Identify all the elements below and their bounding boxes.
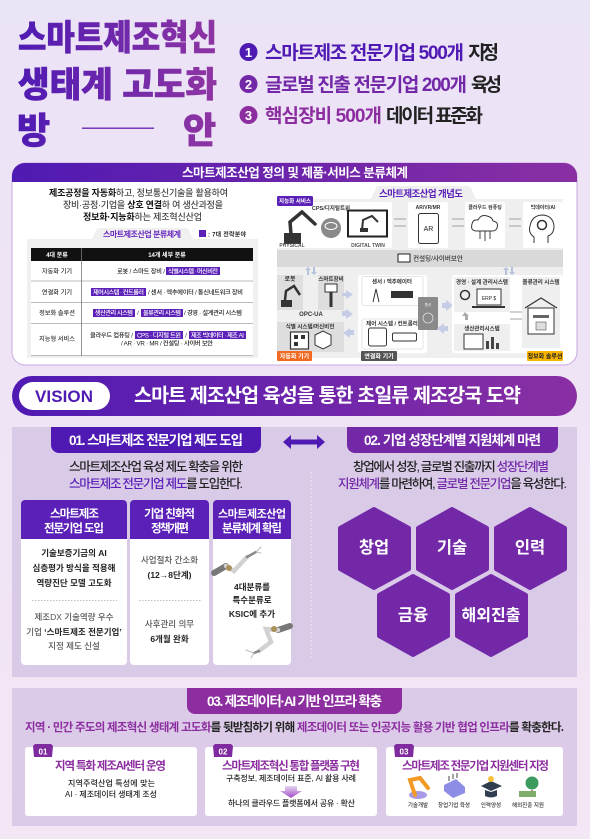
title: 방 <box>17 110 50 151</box>
card 02: integrated platform: 구축정보, 제조데이터 표준, AI 활용 사례 <box>226 773 356 783</box>
card: expert company: 기업 ‘스마트제조 전문기업’ <box>26 627 122 637</box>
card: policy reform: 6개월 완화 <box>150 634 189 644</box>
icon: technology development: 기술개발 <box>408 801 428 809</box>
box: cloud: 클라우드 컴퓨팅 <box>468 204 502 211</box>
hexagon: technology: 기술 <box>437 538 467 557</box>
goal 2: 2 <box>245 77 252 92</box>
box: digital twin: CPS/디지털트윈 <box>312 204 350 212</box>
title: 안 <box>183 110 216 151</box>
flow arrows <box>342 290 453 338</box>
badge 01: 01 <box>39 748 48 756</box>
hexagon: finance <box>379 576 448 655</box>
card 02: integrated platform: 하나의 클라우드 플랫폼에서 공유 · 확산 <box>228 798 356 808</box>
text: pillar 02 intro: 지원체계를 마련하여, 글로벌 전문기업을 육성한다. <box>338 477 567 491</box>
panel: definition and classification <box>12 163 577 365</box>
goal 3 <box>240 105 483 127</box>
badge 02: 02 <box>219 748 228 756</box>
header 01 <box>51 427 261 453</box>
card 03: support center <box>386 744 563 816</box>
key goals list <box>240 42 502 127</box>
concept tab: 스마트제조산업 개념도 <box>379 188 463 200</box>
row: information: 생산관리 시스템 <box>95 309 133 317</box>
goal 2: 육성 <box>471 74 502 96</box>
card 01: regional AI center: 지역 특화 제조AI센터 운영 <box>55 758 166 772</box>
card: expert company <box>21 500 127 665</box>
row: intelligence: 제조 빅데이터 · 제조 AI <box>191 332 244 340</box>
vision pill: VISION <box>35 387 93 406</box>
row: information: / 경영 · 설계관리 시스템 <box>184 309 242 317</box>
badge: connection devices: 연결화 기기 <box>364 352 394 360</box>
box: digital twin: DIGITAL TWIN <box>351 243 385 249</box>
card 02: integrated platform <box>205 744 377 816</box>
card 02: integrated platform: 스마트제조혁신 통합 플랫폼 구현 <box>222 758 360 772</box>
header 01: 01. 스마트제조 전문기업 제도 도입 <box>69 433 243 448</box>
group: connection devices <box>358 275 438 361</box>
icon: monitor <box>348 210 387 236</box>
header 02: 02. 기업 성장단계별 지원체계 마련 <box>364 433 541 448</box>
panel: pillars 01 and 02 <box>12 427 577 677</box>
classification table <box>27 239 258 358</box>
goal 3: 3 <box>245 108 252 123</box>
box: identification system: 식별 시스템/머신비전 <box>286 322 334 330</box>
definition text: 정보화·지능화하는 제조혁신산업 <box>83 211 202 222</box>
row: connection: / 센서 · 엑추에이터 / 통신네트워크 장비 <box>148 288 243 296</box>
text: pillar 01 intro <box>69 460 243 491</box>
arrows between boxes <box>394 219 521 226</box>
box: controller: 제어 시스템 / 컨트롤러 <box>366 320 418 328</box>
goal 1: 1 <box>245 45 252 60</box>
row: information: / <box>137 310 139 317</box>
badge: intelligent service: 지능화 서비스 <box>279 197 311 205</box>
box: AR: AR <box>424 226 433 233</box>
icon: overseas support <box>512 776 544 809</box>
badge: information solution: 정보화 솔루션 <box>528 352 562 360</box>
panel header <box>12 163 577 182</box>
hexagon: overseas: 해외진출 <box>462 606 521 624</box>
hexagon: finance: 금융 <box>398 606 428 624</box>
icon: technology development <box>408 778 428 809</box>
badge 03: 03 <box>400 748 409 756</box>
row: connection: 연결화 기기 <box>42 288 72 296</box>
card: expert company: 스마트제조 <box>50 506 99 520</box>
header 03 <box>187 688 402 714</box>
box: ERP: 경영 · 설계 관리시스템 <box>456 278 508 286</box>
icon: talent cultivation: 인력양성 <box>481 801 501 809</box>
classification tab <box>92 228 193 239</box>
badge: intelligent service <box>277 196 313 206</box>
text: pillar 02 intro: 창업에서 성장, 글로벌 진출까지 성장단계별 <box>353 460 549 474</box>
card: expert company: 제조DX 기술역량 우수 <box>34 612 114 622</box>
card: expert company: 지정 제도 신설 <box>48 641 100 651</box>
box: digital twin <box>277 202 392 249</box>
panel: data and AI infrastructure <box>12 688 577 826</box>
goal 2: 글로벌 진출 전문기업 200개 <box>265 74 467 96</box>
row: automation: 로봇 / 스마트 장비 / <box>117 268 165 276</box>
intro sentence: 지역 · 민간 주도의 제조혁신 생태계 고도화를 뒷받침하기 위해 제조데이터 또는 인공지능 활용 기반 협업 인프라를 확충한다. <box>25 720 564 734</box>
row: intelligence: / AR · VR · MR / 컨설팅 · 사이버 보안 <box>121 340 213 348</box>
row: intelligence: 클라우드 컴퓨팅 / <box>90 332 133 340</box>
card 01: regional AI center: AI · 제조데이터 생태계 조성 <box>65 789 157 799</box>
box: big data AI <box>523 202 563 248</box>
title: 스마트제조혁신 <box>18 19 217 58</box>
row: automation: 자동화 기기 <box>42 268 72 276</box>
vision statement: 스마트 제조산업 육성을 통한 초일류 제조강국 도약 <box>134 385 521 407</box>
icon: robot arm top <box>214 547 261 573</box>
row: intelligence: CPS · 디지털 트윈 <box>137 332 181 340</box>
card: policy reform: 정책개편 <box>151 522 189 535</box>
text: pillar 01 intro: 스마트제조산업 육성 제도 확충을 위한 <box>69 460 243 474</box>
box: sensor: 센서 / 엑추에이터 <box>372 278 412 286</box>
vision banner <box>12 376 577 416</box>
concept tab <box>371 186 476 200</box>
definition text: 제조공정을 자동화하고, 정보통신기술을 활용하여 <box>49 187 228 198</box>
card: expert company: 심층평가 방식을 적용해 <box>33 563 116 573</box>
icon: cloud circle <box>321 218 341 238</box>
card: expert company: 전문기업 도입 <box>44 521 104 535</box>
box: ERP: ERP $ <box>482 296 496 302</box>
bar: consulting and security: 컨설팅/사이버보안 <box>413 254 463 262</box>
hexagon: startup <box>340 509 409 588</box>
row: information <box>39 309 242 317</box>
row: connection: 제어시스템 · 컨트롤러 <box>93 288 144 296</box>
box: logistics: 물류관리 시스템 <box>523 278 559 286</box>
box: cloud <box>465 202 505 248</box>
group: information solutions <box>452 275 563 361</box>
panel header: 스마트제조산업 정의 및 제품·서비스 분류체계 <box>182 165 408 180</box>
row: intelligence: 지능형 서비스 <box>39 335 75 343</box>
card: policy reform: 사후관리 의무 <box>145 619 194 629</box>
title <box>17 19 217 151</box>
definition text <box>49 187 228 222</box>
card 01: regional AI center: 지역주력산업 특성에 맞는 <box>68 778 155 788</box>
hexagon: overseas <box>457 576 526 655</box>
badge 03 <box>394 744 414 757</box>
definition text: 장비·공정·기업을 상호 연결하 여 생산과정을 <box>63 199 223 210</box>
card: expert company: 역량진단 모델 고도화 <box>36 578 112 588</box>
legend <box>199 230 246 238</box>
row: connection <box>42 288 243 296</box>
bar: consulting and security <box>277 250 563 267</box>
card: classification system: 스마트제조산업 <box>218 506 286 520</box>
box: digital twin: PHYSICAL <box>279 243 305 249</box>
card: policy reform: 기업 친화적 <box>144 506 195 520</box>
box: smart equipment: 스마트장비 <box>318 275 344 283</box>
box: AR <box>408 202 448 248</box>
card 01: regional AI center <box>25 744 197 816</box>
arrows: left right <box>510 312 522 319</box>
icon: startup growth: 창업기업 육성 <box>438 801 470 809</box>
title: 생태계 고도화 <box>18 66 217 105</box>
card: policy reform <box>130 500 209 665</box>
icon: startup growth <box>438 773 470 809</box>
row: intelligence <box>39 331 246 348</box>
concept diagram <box>277 186 563 361</box>
card: classification system: 분류체계 확립 <box>222 521 282 535</box>
arrow: up <box>462 312 469 320</box>
goal 3: 핵심장비 500개 <box>265 105 382 127</box>
card: policy reform: 사업절차 간소화 <box>141 555 198 565</box>
legend: : 7대 전략분야 <box>208 230 246 238</box>
arrows up down <box>305 267 515 275</box>
card: classification system <box>213 500 291 665</box>
arrow: down <box>280 786 302 798</box>
classification tab: 스마트제조산업 분류체계 <box>103 229 181 239</box>
goal 1: 지정 <box>468 42 499 64</box>
box: big data AI: 빅데이터/AI <box>531 204 556 211</box>
hexagon: talent: 인력 <box>515 538 545 557</box>
header 03: 03. 제조데이터·AI 기반 인프라 확충 <box>207 693 382 709</box>
icon: talent cultivation <box>481 776 502 809</box>
box: ERP <box>454 277 510 312</box>
icon: overseas support: 해외진출 지원 <box>512 801 544 809</box>
card: expert company: 기술보증기금의 AI <box>41 548 107 558</box>
header 02 <box>347 427 558 453</box>
badge 01 <box>33 744 53 757</box>
hexagon: startup: 창업 <box>359 538 389 557</box>
row: intelligence: / <box>185 332 187 340</box>
classification table: 4대 분류 <box>46 251 68 259</box>
card: classification system: 특수분류로 <box>232 595 272 605</box>
card 03: support center: 스마트제조 전문기업 지원센터 지정 <box>402 758 549 772</box>
card: classification system: KSIC에 추가 <box>229 609 275 619</box>
row: information: 정보화 솔루션 <box>39 309 75 317</box>
icon: robot arm bottom <box>246 626 290 658</box>
group: automation devices <box>277 275 344 361</box>
icon: robot arm <box>284 212 315 244</box>
hexagon: technology <box>418 509 487 588</box>
goal 3: 데이터 표준화 <box>386 105 483 127</box>
badge: automation devices: 자동화 기기 <box>280 352 309 360</box>
text: pillar 02 intro <box>338 460 567 491</box>
box: production: 생산관리시스템 <box>464 324 500 332</box>
box: robot: 로봇 <box>284 275 296 283</box>
vision pill <box>19 382 110 410</box>
group: automation devices: OPC-UA <box>299 312 323 318</box>
gateway box: 통신 <box>425 302 431 307</box>
card: classification system: 4대분류를 <box>234 582 270 592</box>
arrow: double <box>283 435 325 449</box>
row: automation: 식별시스템 · 머신비전 <box>168 268 218 276</box>
hexagon: talent <box>496 509 565 588</box>
goal 1: 스마트제조 전문기업 500개 <box>265 42 464 64</box>
classification table: 14개 세부 분류 <box>148 251 186 259</box>
box: AR: AR/VR/MR <box>416 205 441 211</box>
row: automation <box>42 267 220 276</box>
card: policy reform: (12→8단계) <box>148 570 192 580</box>
badge 02 <box>213 744 233 757</box>
text: pillar 01 intro: 스마트제조 전문기업 제도를 도입한다. <box>69 477 243 491</box>
row: information: 물류관리 시스템 <box>143 309 181 317</box>
